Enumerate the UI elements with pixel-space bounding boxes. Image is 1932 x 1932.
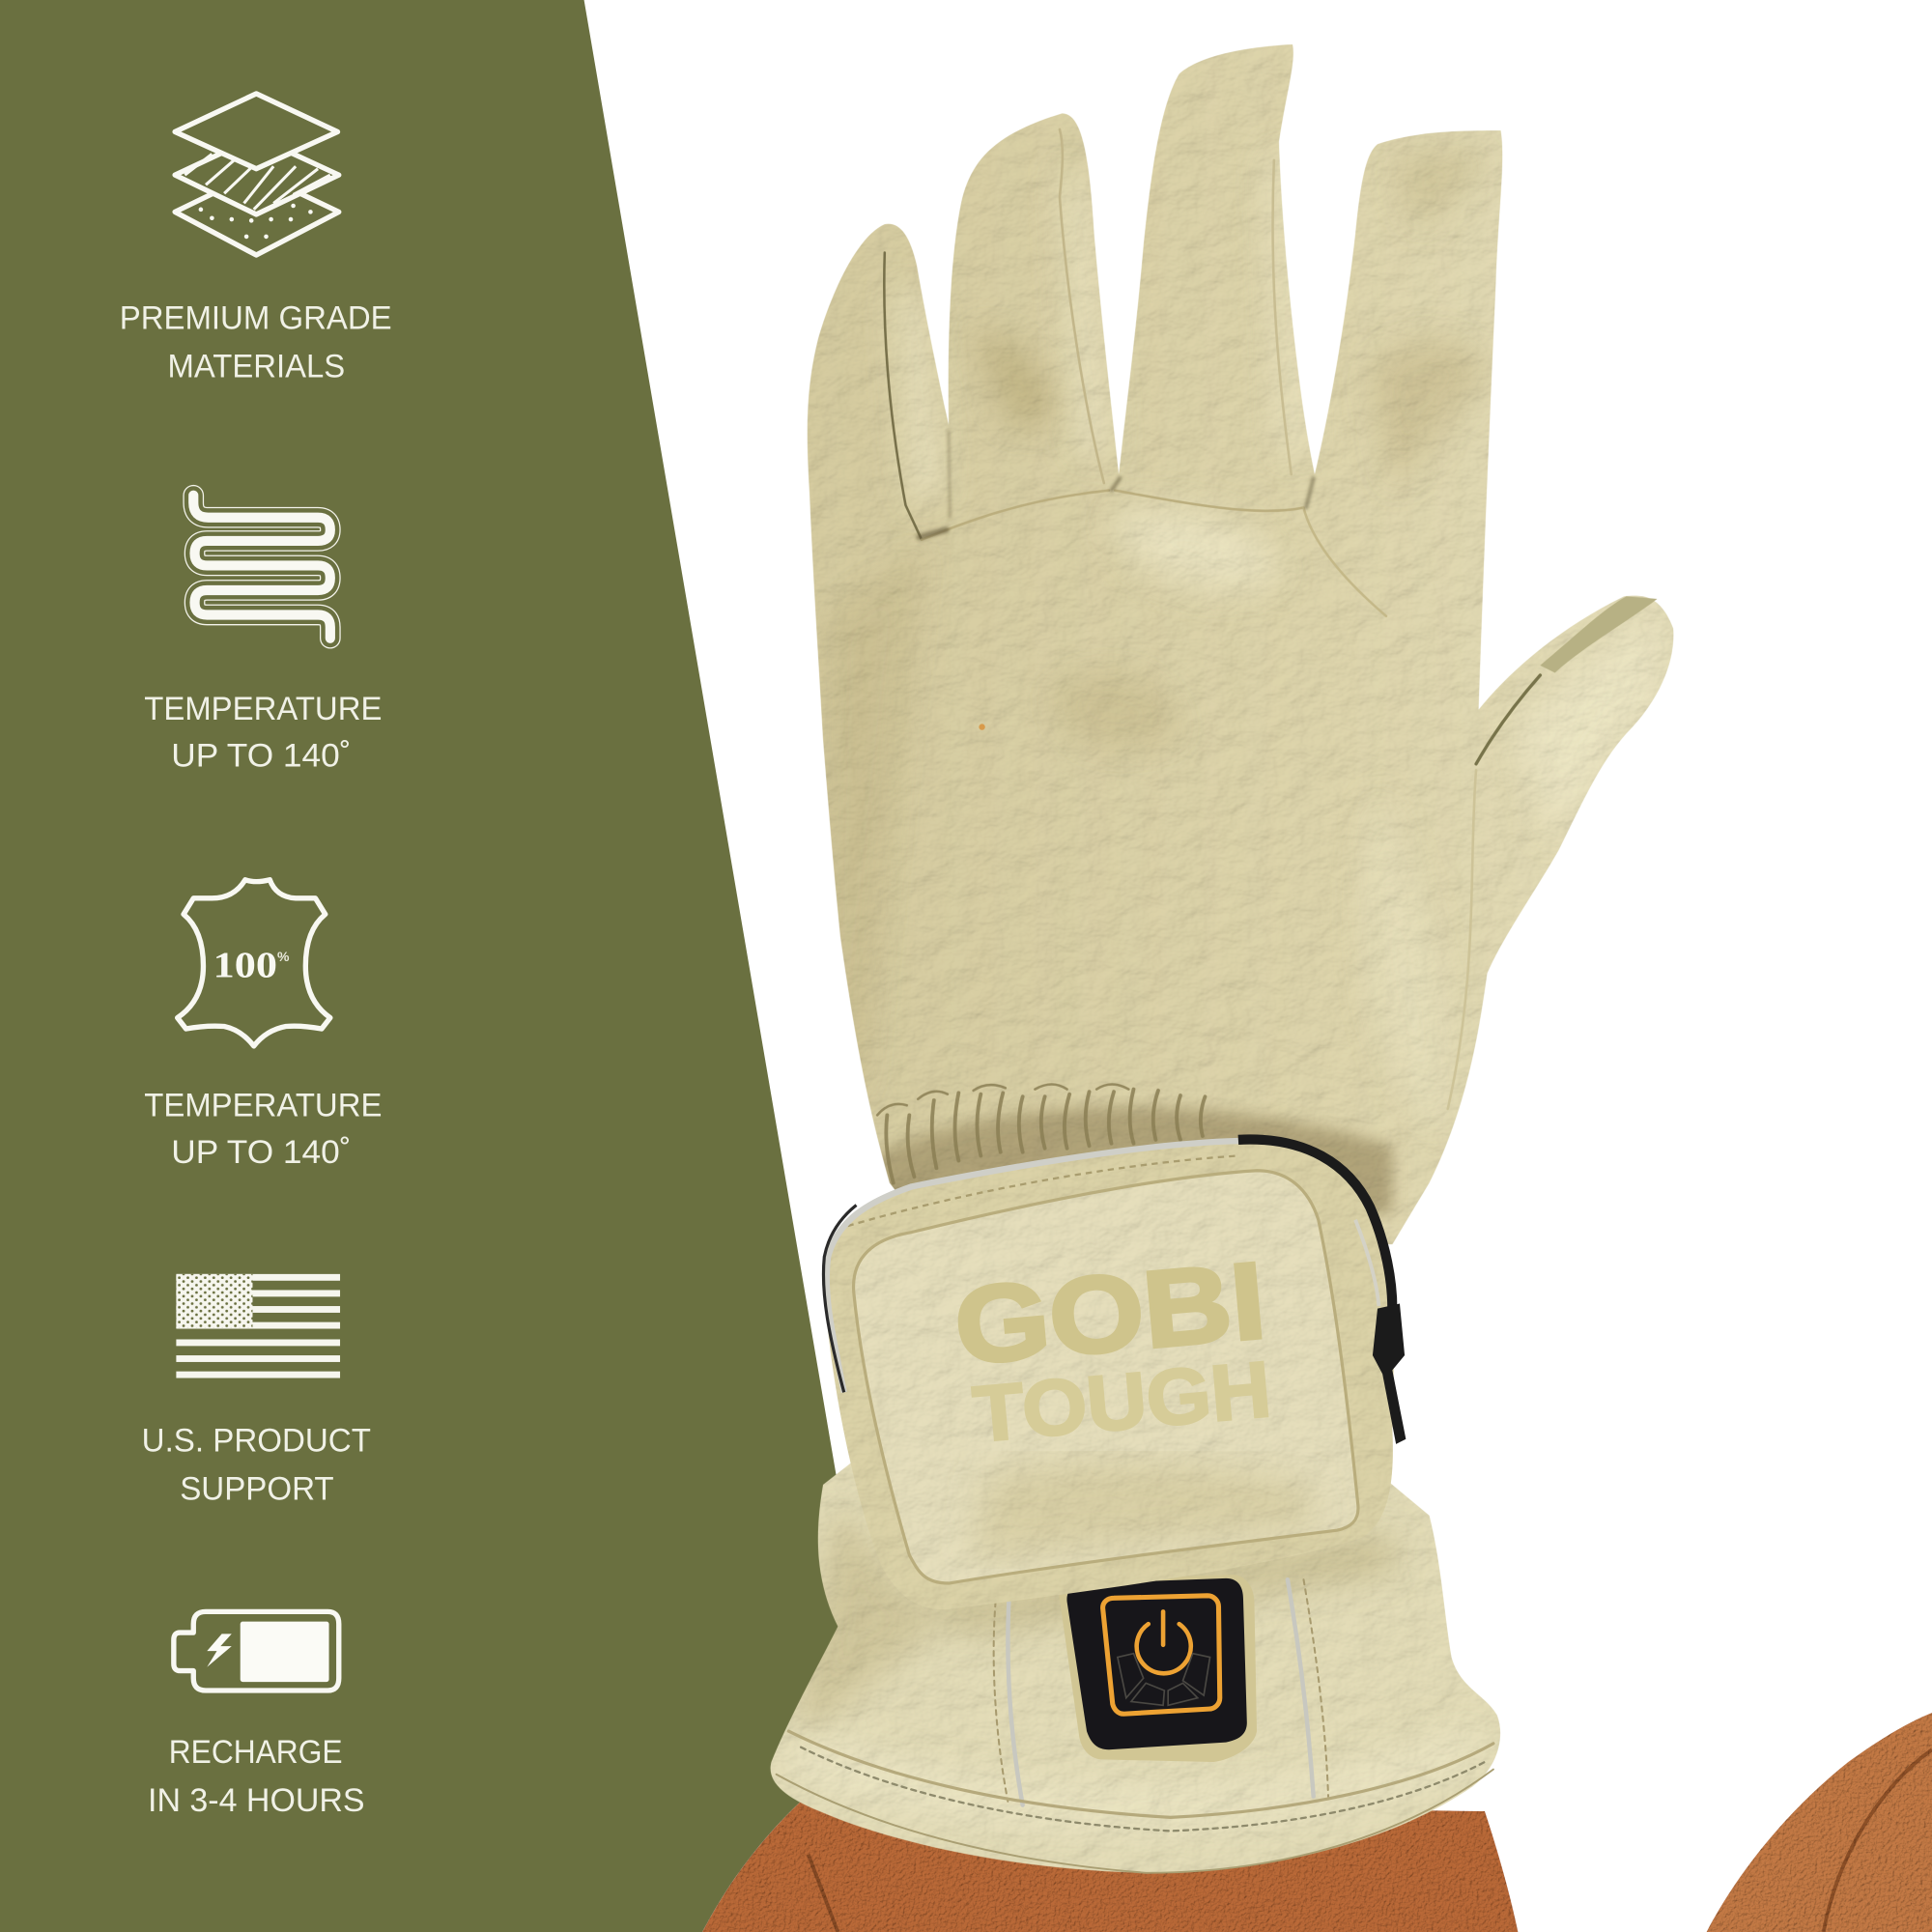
finger seams — [884, 129, 1540, 1109]
icon: heating coil — [193, 496, 330, 639]
panel: features sidebar — [0, 0, 914, 1932]
label: SUPPORT — [180, 1470, 334, 1507]
feature: 100% leather — [144, 880, 382, 1171]
icon: leather hide: 100 — [213, 945, 277, 985]
label: U.S. PRODUCT — [142, 1423, 371, 1460]
icon: battery — [174, 1611, 339, 1690]
label: RECHARGE — [169, 1734, 343, 1771]
thumb inner strip — [1540, 596, 1658, 672]
spot — [979, 724, 985, 730]
label — [142, 1423, 371, 1507]
glove: lower cuff — [752, 1441, 1516, 1886]
zipper tape — [827, 1141, 1238, 1392]
feature: premium grade materials — [120, 94, 392, 384]
icon: US flag — [176, 1274, 340, 1378]
label: TEMPERATURE — [144, 691, 382, 727]
flap inner stitching — [854, 1171, 1358, 1583]
feature: temperature heating element — [144, 496, 382, 774]
mode keys — [1118, 1654, 1210, 1705]
label: TEMPERATURE — [144, 1088, 382, 1124]
label: PREMIUM GRADE — [120, 300, 392, 337]
power symbol — [1137, 1611, 1191, 1673]
glove: zip pocket flap — [813, 1127, 1406, 1620]
label — [144, 1088, 382, 1171]
logo: TOUGH: TOUGH — [970, 1346, 1274, 1459]
orange frame — [1103, 1596, 1220, 1714]
icon: leather hide — [178, 880, 330, 1046]
cuff seams — [777, 1579, 1493, 1873]
gap shadows at finger bases — [920, 431, 1314, 537]
label: UP TO 140˚ — [171, 737, 352, 774]
label — [144, 691, 382, 774]
glove: hand and fingers — [788, 25, 1700, 1257]
glove: elastic wrist gathers — [877, 1084, 1205, 1182]
icon: material layers — [175, 94, 339, 255]
label — [148, 1734, 365, 1819]
feature: recharge time — [148, 1611, 365, 1819]
zipper teeth — [1238, 1140, 1392, 1309]
icon: leather hide: % — [277, 949, 290, 964]
sleeve: right arm — [1707, 1713, 1932, 1932]
logo: GOBI: GOBI — [950, 1238, 1270, 1387]
label: MATERIALS — [167, 348, 345, 384]
sleeve: left arm — [702, 1802, 1518, 1932]
zip pull — [1373, 1303, 1406, 1444]
label: UP TO 140˚ — [171, 1134, 352, 1171]
label — [120, 300, 392, 384]
feature: U.S. product support — [142, 1274, 371, 1507]
label: IN 3-4 HOURS — [148, 1782, 365, 1819]
control button — [1060, 1575, 1257, 1762]
